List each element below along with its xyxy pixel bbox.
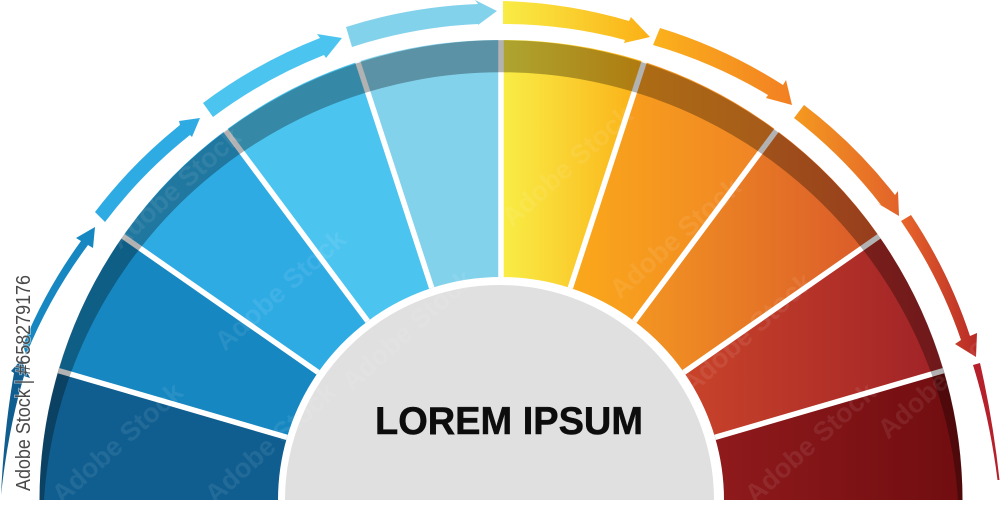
vertical stock ID text: Adobe Stock | #658279176 xyxy=(13,275,35,491)
faint diagonal stock watermarks: Adobe Stock xyxy=(199,376,342,509)
arrow 10: dark red tapered xyxy=(973,363,1000,480)
segment 4: light sky blue xyxy=(226,62,432,321)
faint diagonal stock watermarks: Adobe Stock xyxy=(46,376,189,509)
segment 10: dark red xyxy=(715,371,962,500)
segment 3: sky blue xyxy=(123,130,368,372)
faint diagonal stock watermarks: Adobe Stock xyxy=(209,223,352,356)
faint diagonal stock watermarks: Adobe Stock xyxy=(676,266,819,399)
segment 9: red xyxy=(684,236,944,437)
faint diagonal stock watermarks: Adobe Stock xyxy=(104,121,247,254)
segment 5: pale blue xyxy=(358,40,501,288)
center grey semicircle xyxy=(285,285,714,500)
arrow 4: light sky blue xyxy=(203,34,342,117)
center title: LOREM IPSUM xyxy=(375,400,643,443)
arrow 2: blue tapered xyxy=(23,227,95,355)
segment 6: yellow xyxy=(501,40,644,288)
arrow 3: sky blue xyxy=(95,118,200,222)
segment 1: navy blue xyxy=(40,371,287,500)
arrow 9: red-orange xyxy=(901,215,977,357)
faint diagonal stock watermarks: Adobe Stock xyxy=(739,376,882,509)
arrow 1: dark blue tapered xyxy=(1,360,30,495)
faint diagonal stock watermarks: Adobe Stock xyxy=(496,99,639,232)
faint diagonal stock watermarks: Adobe Stock xyxy=(336,263,479,396)
segment 7: orange xyxy=(570,62,776,321)
arrow 8: deep orange xyxy=(794,105,899,216)
arrow 7: orange xyxy=(653,28,792,105)
segment 8: deep orange xyxy=(634,130,879,372)
arrow 5: pale blue xyxy=(346,0,497,47)
arrow 6: yellow xyxy=(503,1,650,43)
faint diagonal stock watermarks xyxy=(46,99,1000,509)
segment 2: blue xyxy=(58,236,318,437)
faint diagonal stock watermarks: Adobe Stock xyxy=(604,171,747,304)
